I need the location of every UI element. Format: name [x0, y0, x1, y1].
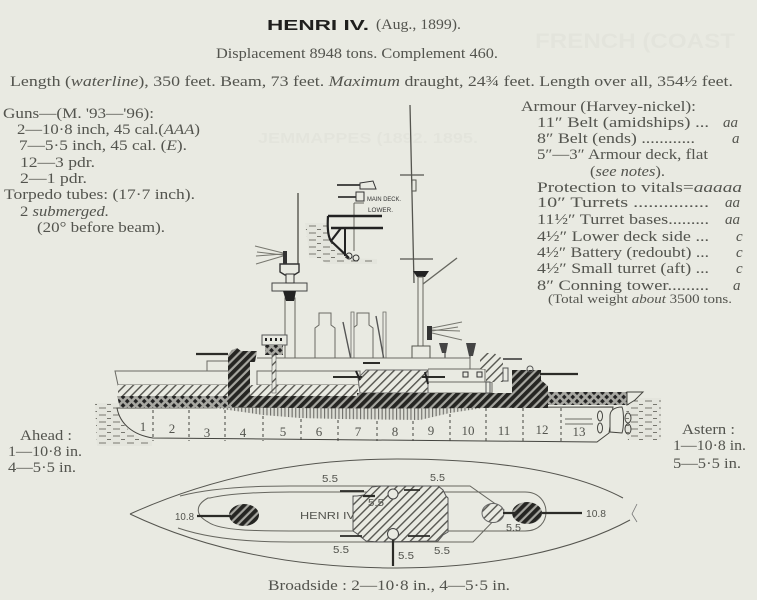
- compartment numbers: 2: [169, 421, 175, 436]
- guns text block: 2 submerged.: [20, 204, 109, 220]
- ahead fire text: [8, 428, 82, 476]
- guns text block: (20° before beam).: [37, 220, 165, 236]
- searchlight beams, fore: [255, 246, 283, 264]
- guns text block: [3, 106, 200, 236]
- armour text block: 4½″ Battery (redoubt) ...: [537, 245, 709, 261]
- bow upper hull: [115, 371, 230, 385]
- compartment numbers: 10: [462, 423, 474, 438]
- armour text block: 4½″ Lower deck side ...: [537, 229, 709, 245]
- plan labels: 5.5: [333, 545, 349, 556]
- guns text block: 7—5·5 inch, 45 cal. ( E).: [19, 138, 187, 154]
- compartment numbers: 13: [572, 424, 586, 439]
- plan labels: 10.8: [586, 509, 606, 520]
- water at bow: [95, 403, 152, 446]
- aft turret plan: [512, 502, 542, 524]
- armour text block: c: [736, 245, 743, 261]
- plan labels: 5.5: [506, 523, 521, 534]
- deck plan: [130, 459, 637, 568]
- compartment numbers: [140, 419, 586, 440]
- armour text block: Protection to vitals= aaaaa: [537, 180, 742, 196]
- astern fire text: 1—10·8 in.: [673, 438, 746, 454]
- water at stern: [625, 398, 661, 440]
- inset label: lower: LOWER.: [368, 207, 393, 214]
- dimensions line: Length ( waterline ), 350 feet. Beam, 73 feet. Maximum draught, 24¾ feet. Length over all, 354½ feet.: [10, 74, 733, 90]
- armour text block: [521, 99, 743, 306]
- armour text block: 5″—3″ Armour deck, flat: [537, 147, 709, 163]
- plan labels: 5.5: [430, 473, 445, 484]
- armour text block: aa: [725, 212, 740, 228]
- plan inner citadel outline: [198, 492, 546, 531]
- midship section inset: [305, 181, 401, 264]
- small aft turret: [480, 353, 503, 382]
- aft turret gun: [540, 373, 578, 375]
- armour text block: c: [736, 229, 743, 245]
- compartment numbers: 6: [316, 424, 323, 439]
- plan labels: 5.5: [398, 551, 414, 562]
- ghost bleed-through text: FRENCH (COAST: [535, 30, 735, 53]
- inset label: main deck: MAIN DECK.: [367, 196, 401, 203]
- aft small turret plan: [482, 504, 504, 522]
- guns text block: 2—1 pdr.: [20, 171, 87, 187]
- plan gun barrels: [197, 496, 582, 566]
- compartment numbers: 8: [392, 424, 398, 439]
- stern post, rudder, propellers: [565, 407, 631, 434]
- stern point: [627, 392, 643, 405]
- compartment numbers: 7: [355, 424, 362, 439]
- broadside text: Broadside : 2—10·8 in., 4—5·5 in.: [268, 578, 510, 594]
- underwater hull: [117, 407, 613, 442]
- compartment numbers: 11: [498, 423, 510, 438]
- compartment numbers: 5: [280, 424, 286, 439]
- compartment numbers: 4: [240, 425, 247, 440]
- bow crossed hatching: [117, 396, 232, 408]
- astern fire text: 5—5·5 in.: [673, 456, 741, 472]
- forward turret plan: [229, 504, 259, 526]
- compartment numbers: 12: [536, 422, 548, 437]
- guns text block: Guns—(M. '93—'96):: [3, 106, 154, 122]
- armour text block: 11″ Belt (amidships) ...: [537, 115, 709, 131]
- displacement line: Displacement 8948 tons. Complement 460.: [216, 46, 498, 62]
- title date: (Aug., 1899).: [376, 17, 461, 33]
- compartment numbers: 3: [204, 425, 210, 440]
- vertical hatched belt: [215, 407, 490, 420]
- armour text block: 8″ Belt (ends) ............: [537, 131, 695, 147]
- armour text block: a: [732, 131, 740, 147]
- title: HENRI IV.: [267, 17, 369, 34]
- astern fire text: Astern :: [682, 422, 735, 438]
- plan labels: 10.8: [175, 512, 194, 523]
- conning tower: [262, 335, 287, 393]
- bulkhead lines: [153, 408, 561, 441]
- ahead fire text: 4—5·5 in.: [8, 460, 76, 476]
- fore turret gun: [196, 353, 228, 355]
- superstructure outlines: [207, 358, 492, 393]
- armour text block: 11½″ Turret bases.........: [537, 212, 709, 228]
- armour text block: (see notes ).: [590, 164, 665, 180]
- plan labels: [175, 473, 606, 562]
- ahead fire text: 1—10·8 in.: [8, 444, 82, 460]
- guns text block: 12—3 pdr.: [20, 155, 95, 171]
- armour text block: aa: [723, 115, 738, 131]
- armour text block: a: [733, 278, 740, 294]
- armour text block: aa: [725, 195, 740, 211]
- mainmast: [400, 105, 476, 358]
- armoured belt dark hatching: [232, 396, 547, 408]
- compartment numbers: 1: [140, 419, 146, 434]
- armour text block: 4½″ Small turret (aft) ...: [537, 261, 709, 277]
- searchlight beams, main: [432, 322, 462, 340]
- plan labels: 5.5: [368, 498, 384, 509]
- ghost bleed-through text: JEMMAPPES (1892. 1895.: [258, 130, 478, 147]
- plan deck outline: [178, 486, 504, 542]
- ship side elevation: [115, 335, 643, 442]
- plan hull outline: [130, 459, 630, 568]
- armour text block: Armour (Harvey-nickel):: [521, 99, 696, 115]
- guns text block: 2—10·8 inch, 45 cal.( AAA): [17, 122, 200, 138]
- guns text block: Torpedo tubes: (17·7 inch).: [4, 187, 195, 203]
- plan labels: HENRI IV: [300, 511, 355, 522]
- foremast with fighting tops: [255, 193, 307, 360]
- plan labels: 5.5: [322, 474, 338, 485]
- upper belt hatching: [118, 385, 358, 396]
- funnels: [315, 312, 386, 360]
- armour text block: c: [736, 261, 743, 277]
- central battery hatching: [358, 370, 428, 393]
- plan labels: 5.5: [434, 546, 450, 557]
- ghost bleed-through text: [258, 30, 735, 147]
- compartment numbers: 9: [428, 423, 434, 438]
- armour text block: (Total weight about 3500 tons.: [548, 291, 732, 306]
- stern crossed hatching: [547, 392, 627, 405]
- ahead fire text: Ahead :: [20, 428, 72, 444]
- armour text block: 10″ Turrets ...............: [537, 195, 709, 211]
- armour text block: 8″ Conning tower.........: [537, 278, 709, 294]
- central redoubt: [353, 486, 448, 542]
- secondary guns: [333, 363, 445, 377]
- fore turret and barbette: [228, 348, 257, 405]
- astern fire text: [673, 422, 746, 472]
- aft turret and barbette: [512, 370, 548, 408]
